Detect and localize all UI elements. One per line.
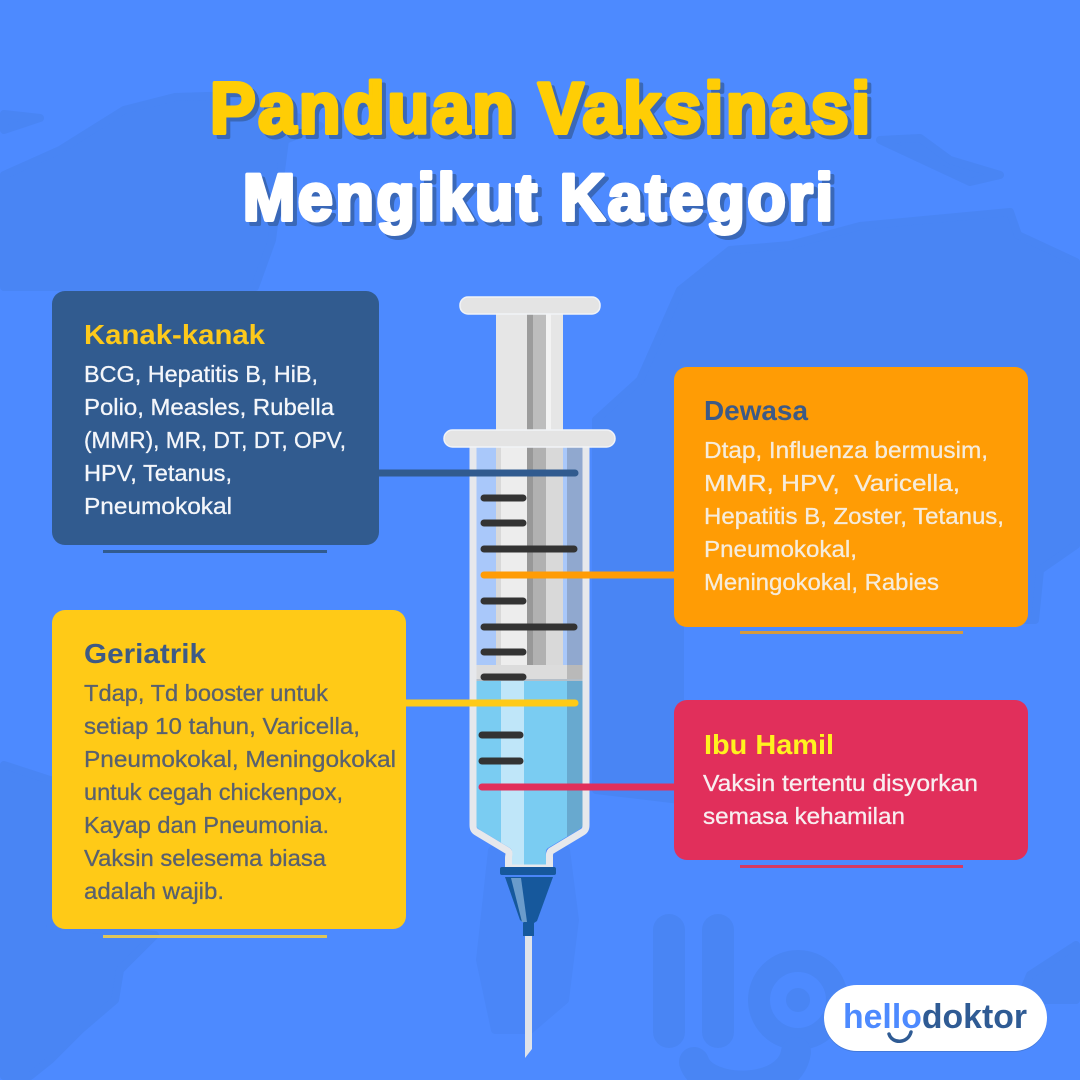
needle <box>525 936 532 1058</box>
plunger rod <box>496 313 563 433</box>
plunger top flange <box>460 297 600 314</box>
text: Geriatrik vaccines: adalah wajib. <box>84 878 224 904</box>
needle hub <box>500 867 556 936</box>
text: Ibu Hamil vaccines: Vaksin tertentu disyorkan <box>703 770 978 796</box>
text: Geriatrik vaccines: setiap 10 tahun, Varicella, <box>84 713 360 739</box>
text: Ibu Hamil vaccines <box>703 770 978 829</box>
text: Ibu Hamil vaccines: semasa kehamilan <box>703 803 905 829</box>
panel: Geriatrik <box>52 610 406 938</box>
text: Geriatrik vaccines: Kayap dan Pneumonia. <box>84 812 329 838</box>
heading: Ibu Hamil: Ibu Hamil <box>704 729 834 760</box>
logo wordmark: hellodoktor <box>843 998 1027 1036</box>
heading: Geriatrik: Geriatrik <box>84 638 206 669</box>
barrel liquid and glass <box>473 445 586 870</box>
title <box>210 67 874 238</box>
measurement ticks <box>482 498 574 761</box>
finger flange <box>444 430 615 447</box>
panel: Dewasa <box>674 367 1028 634</box>
text: Dewasa vaccines: MMR, HPV, Varicella, <box>704 470 960 496</box>
logo: hellodoktor <box>824 985 1047 1052</box>
panel: Kanak-kanak <box>52 291 379 553</box>
connector line: Dewasa <box>484 572 676 578</box>
connector line: Geriatrik <box>404 700 575 706</box>
connector line: Kanak-kanak <box>378 470 575 476</box>
background logo watermark <box>669 930 837 1080</box>
text: Kanak-kanak vaccines: HPV, Tetanus, <box>84 460 232 486</box>
title line 2: Mengikut Kategori: Mengikut Kategori <box>243 161 833 234</box>
panel: Ibu Hamil <box>674 700 1028 868</box>
text: Dewasa vaccines: Meningokokal, Rabies <box>704 569 939 595</box>
syringe <box>444 297 615 1058</box>
heading: Dewasa: Dewasa <box>704 395 808 426</box>
title line 1: Panduan Vaksinasi: Panduan Vaksinasi <box>214 71 874 152</box>
connector line: Ibu Hamil <box>482 784 676 790</box>
text: Geriatrik vaccines <box>84 680 396 904</box>
text: Kanak-kanak vaccines: BCG, Hepatitis B, HiB, <box>84 361 318 387</box>
text: Kanak-kanak vaccines: (MMR), MR, DT, DT, OPV, <box>84 427 346 453</box>
text: Geriatrik vaccines: Pneumokokal, Meningokokal <box>84 746 396 772</box>
text: Kanak-kanak vaccines <box>84 361 346 519</box>
text: Kanak-kanak vaccines: Polio, Measles, Rubella <box>84 394 334 420</box>
heading: Kanak-kanak: Kanak-kanak <box>84 319 265 350</box>
title line 2: Mengikut Kategori: Mengikut Kategori <box>247 165 837 238</box>
text: Geriatrik vaccines: Tdap, Td booster untuk <box>84 680 329 706</box>
text: Dewasa vaccines: Pneumokokal, <box>704 536 857 562</box>
title line 1: Panduan Vaksinasi: Panduan Vaksinasi <box>210 67 870 148</box>
text: Dewasa vaccines <box>704 437 1004 595</box>
text: Dewasa vaccines: Hepatitis B, Zoster, Tetanus, <box>704 503 1004 529</box>
text: Geriatrik vaccines: untuk cegah chickenpox, <box>84 779 343 805</box>
text: Geriatrik vaccines: Vaksin selesema biasa <box>84 845 326 871</box>
text: Dewasa vaccines: Dtap, Influenza bermusim, <box>704 437 988 463</box>
text: Kanak-kanak vaccines: Pneumokokal <box>84 493 232 519</box>
logo smile <box>889 1032 911 1041</box>
